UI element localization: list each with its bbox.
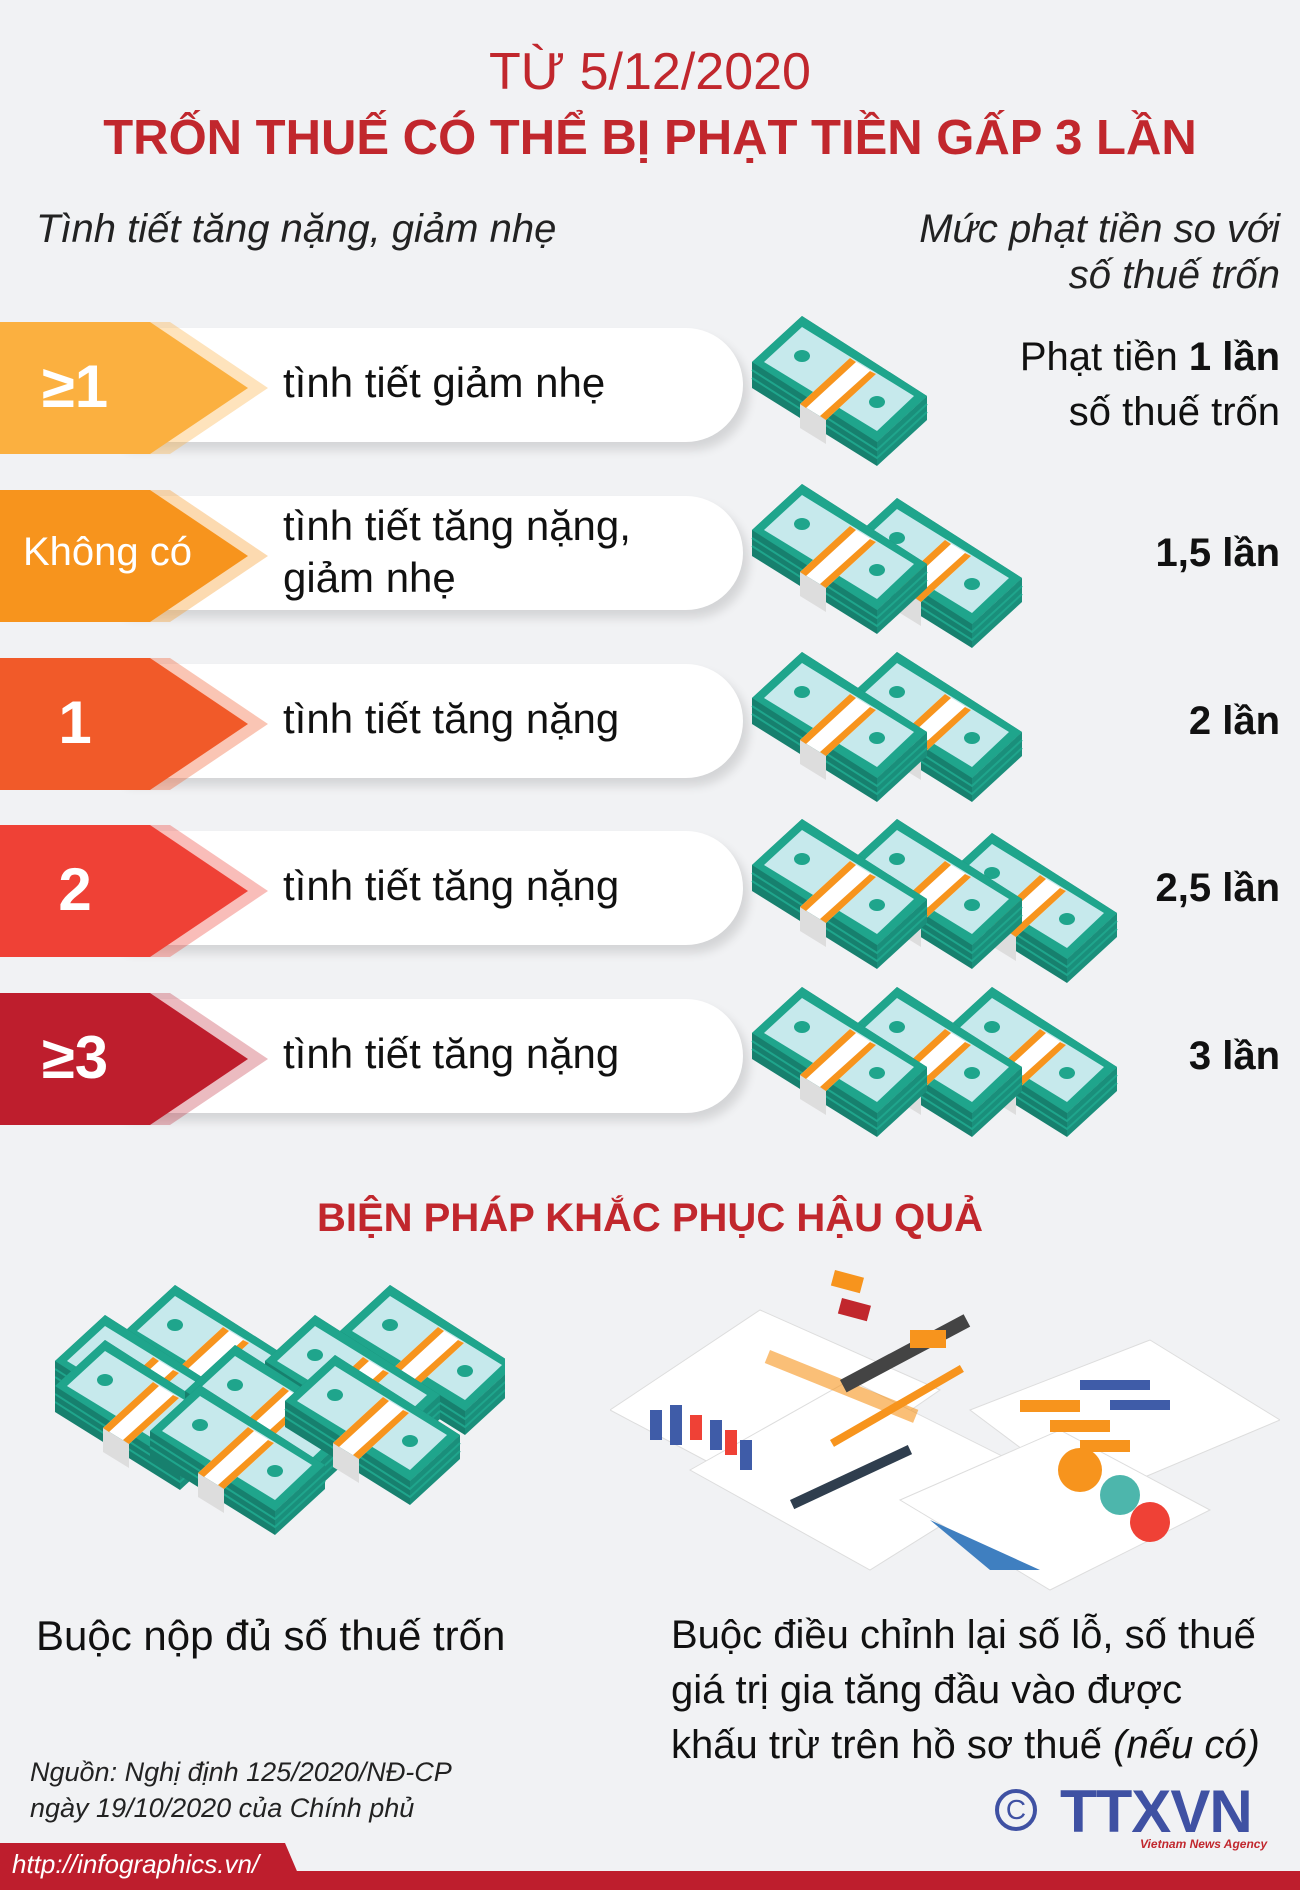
row 1: ≥1 (42, 353, 108, 420)
title: main: TRỐN THUẾ CÓ THỂ BỊ PHẠT TIỀN GẤP 3 LẦN (103, 111, 1197, 165)
result: 2 lần (1189, 699, 1280, 743)
row 4 (0, 819, 1280, 983)
result: 3 lần (1189, 1034, 1280, 1078)
icon: money 2 (752, 652, 1023, 802)
row 3: 1 (58, 689, 92, 756)
text: measure 2: khấu trừ trên hồ sơ thuế (nếu có) (671, 1723, 1260, 1767)
row 5: ≥3 (42, 1024, 108, 1091)
icon: money 1.5 (752, 484, 1023, 648)
row 2 (0, 484, 1280, 648)
source (30, 1757, 452, 1823)
label: tình tiết tăng nặng (283, 1030, 619, 1077)
label: tình tiết tăng nặng (283, 695, 619, 742)
row 4: 2 (58, 856, 92, 923)
arrow badge (0, 322, 268, 454)
illustration: documents and pens (610, 1270, 1280, 1590)
text: measure 1: Buộc nộp đủ số thuế trốn (36, 1612, 505, 1659)
footer url tab (0, 1843, 297, 1878)
text: measure 2: Buộc điều chỉnh lại số lỗ, số thuế (671, 1613, 1256, 1657)
result: Phạt tiền 1 lần (1020, 335, 1280, 379)
illustration: money pile (55, 1285, 505, 1535)
source: ngày 19/10/2020 của Chính phủ (30, 1793, 414, 1823)
result: số thuế trốn (1069, 390, 1280, 434)
row 5 (0, 987, 1280, 1137)
title: date: TỪ 5/12/2020 (489, 43, 811, 101)
result: 2,5 lần (1155, 866, 1280, 910)
subheading right: Mức phạt tiền so với (919, 207, 1280, 251)
footer bar (0, 1871, 1300, 1890)
logo: TTXVN: TTXVN (1060, 1778, 1252, 1845)
logo: TTXVN: C (1006, 1794, 1026, 1825)
label: giảm nhẹ (283, 554, 456, 601)
row 1 (0, 316, 1280, 466)
subheading left: Tình tiết tăng nặng, giảm nhẹ (36, 207, 556, 251)
logo: TTXVN: Vietnam News Agency (1140, 1837, 1267, 1851)
icon: money 3 (752, 987, 1118, 1137)
row 3 (0, 652, 1280, 802)
result (1020, 335, 1280, 434)
subheading right: số thuế trốn (1069, 253, 1280, 297)
label: tình tiết tăng nặng, (283, 502, 631, 549)
subheading right (919, 207, 1281, 297)
label: tình tiết giảm nhẹ (283, 359, 605, 406)
label: tình tiết tăng nặng (283, 862, 619, 909)
section heading: BIỆN PHÁP KHẮC PHỤC HẬU QUẢ (317, 1196, 983, 1240)
row 2: Không có (23, 530, 192, 574)
result: 1,5 lần (1155, 531, 1280, 575)
icon: money 2.5 (752, 819, 1118, 983)
source: Nguồn: Nghị định 125/2020/NĐ-CP (30, 1757, 452, 1787)
icon: money 1 (752, 316, 928, 466)
text: measure 2: giá trị gia tăng đầu vào được (671, 1668, 1182, 1712)
footer url tab: http://infographics.vn/ (12, 1849, 259, 1879)
text: measure 2 (671, 1613, 1260, 1767)
logo: TTXVN (995, 1778, 1268, 1851)
label (283, 502, 631, 601)
